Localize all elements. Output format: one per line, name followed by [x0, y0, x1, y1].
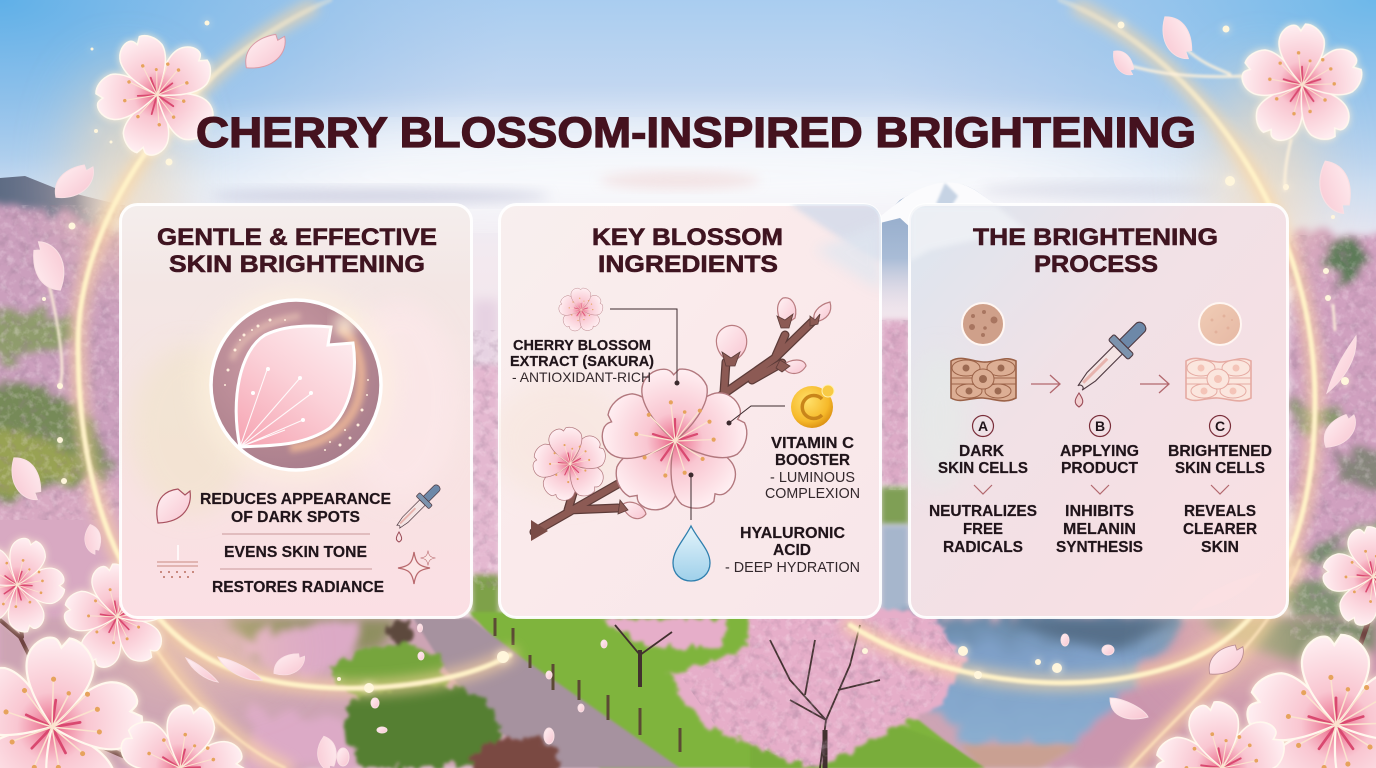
gaps between panels [472, 300, 499, 380]
callout: vitamin c booster [726, 385, 860, 502]
petal tail inside panel corner [1190, 572, 1262, 612]
heading: panel 1 [157, 224, 437, 278]
heading: panel 1: GENTLE & EFFECTIVE [157, 224, 437, 251]
panel: the brightening process [909, 204, 1288, 618]
ring halo [75, 70, 1315, 680]
foliage texture [0, 205, 1376, 768]
step A: dark skin cells: RADICALS [943, 539, 1023, 556]
icon: blossom branch [524, 298, 831, 541]
text: reduces appearance of dark spots [200, 491, 391, 526]
left and right tree masses [0, 206, 1376, 768]
step B: applying product: SYNTHESIS [1056, 539, 1143, 556]
icon: petal [157, 489, 190, 523]
heading: panel 2 [592, 224, 783, 278]
heading: panel 3: PROCESS [1034, 251, 1158, 278]
callout: cherry blossom extract: CHERRY BLOSSOM [513, 338, 651, 354]
step A: dark skin cells [929, 303, 1037, 556]
corner branches [0, 600, 1376, 768]
heading: panel 3 [973, 224, 1218, 278]
icon: dropper small [392, 480, 445, 542]
text: reduces appearance of dark spots: REDUCES APPEARANCE [200, 491, 391, 508]
callout: cherry blossom extract [510, 288, 680, 386]
icon: skin layers [157, 545, 198, 577]
title backdrop glow [170, 101, 1210, 169]
step C: brightened skin cells: CLEARER [1183, 521, 1257, 538]
step A: dark skin cells: DARK [959, 443, 1005, 460]
panel: gentle and effective skin brightening [120, 204, 472, 618]
heading: panel 2: KEY BLOSSOM [592, 224, 783, 251]
step C: brightened skin cells: BRIGHTENED [1168, 443, 1272, 460]
callout: vitamin c booster: BOOSTER [775, 452, 850, 469]
step A: dark skin cells: NEUTRALIZES [929, 503, 1037, 520]
heading: panel 2: INGREDIENTS [598, 251, 778, 278]
step C: brightened skin cells: SKIN [1201, 539, 1239, 556]
step B: applying product: APPLYING [1060, 443, 1139, 460]
callout: hyaluronic acid: ACID [773, 542, 811, 559]
ground [0, 610, 1376, 768]
step B: applying product [1056, 314, 1154, 556]
arrow: B to C [1140, 375, 1169, 393]
icon: glowing petal disc [198, 287, 394, 483]
heading: panel 3: THE BRIGHTENING [973, 224, 1218, 251]
step C: brightened skin cells: REVEALS [1184, 503, 1256, 520]
callout: vitamin c booster: - LUMINOUS [770, 470, 855, 486]
step A: dark skin cells: FREE [963, 521, 1003, 538]
light trails and petal streaks [48, 48, 1335, 385]
step C: brightened skin cells: C [1215, 418, 1225, 434]
step B: applying product: INHIBITS [1065, 503, 1134, 520]
callout: cherry blossom extract: - ANTIOXIDANT-RICH [512, 369, 651, 385]
text: evens skin tone: EVENS SKIN TONE [224, 544, 367, 561]
callout: hyaluronic acid: - DEEP HYDRATION [725, 560, 860, 576]
text: reduces appearance of dark spots: OF DARK SPOTS [231, 509, 360, 526]
callout: cherry blossom extract: EXTRACT (SAKURA) [510, 354, 654, 370]
step A: dark skin cells: SKIN CELLS [938, 460, 1028, 477]
arrow: A to B [1031, 375, 1060, 393]
step C: brightened skin cells: SKIN CELLS [1175, 460, 1265, 477]
step B: applying product: MELANIN [1063, 521, 1136, 538]
step B: applying product: PRODUCT [1061, 460, 1139, 477]
step C: brightened skin cells [1168, 303, 1272, 556]
step A: dark skin cells: A [978, 418, 988, 434]
panel: key blossom ingredients [490, 204, 881, 618]
step B: applying product: B [1095, 418, 1105, 434]
callout: hyaluronic acid: HYALURONIC [740, 525, 845, 542]
title: CHERRY BLOSSOM-INSPIRED BRIGHTENING [196, 109, 1196, 157]
callout: vitamin c booster: VITAMIN C [771, 435, 854, 452]
callout: hyaluronic acid [673, 472, 860, 581]
heading: panel 1: SKIN BRIGHTENING [169, 251, 425, 278]
callout: vitamin c booster: COMPLEXION [765, 486, 860, 502]
icon: sparkles [398, 550, 436, 584]
text: restores radiance: RESTORES RADIANCE [212, 579, 384, 596]
